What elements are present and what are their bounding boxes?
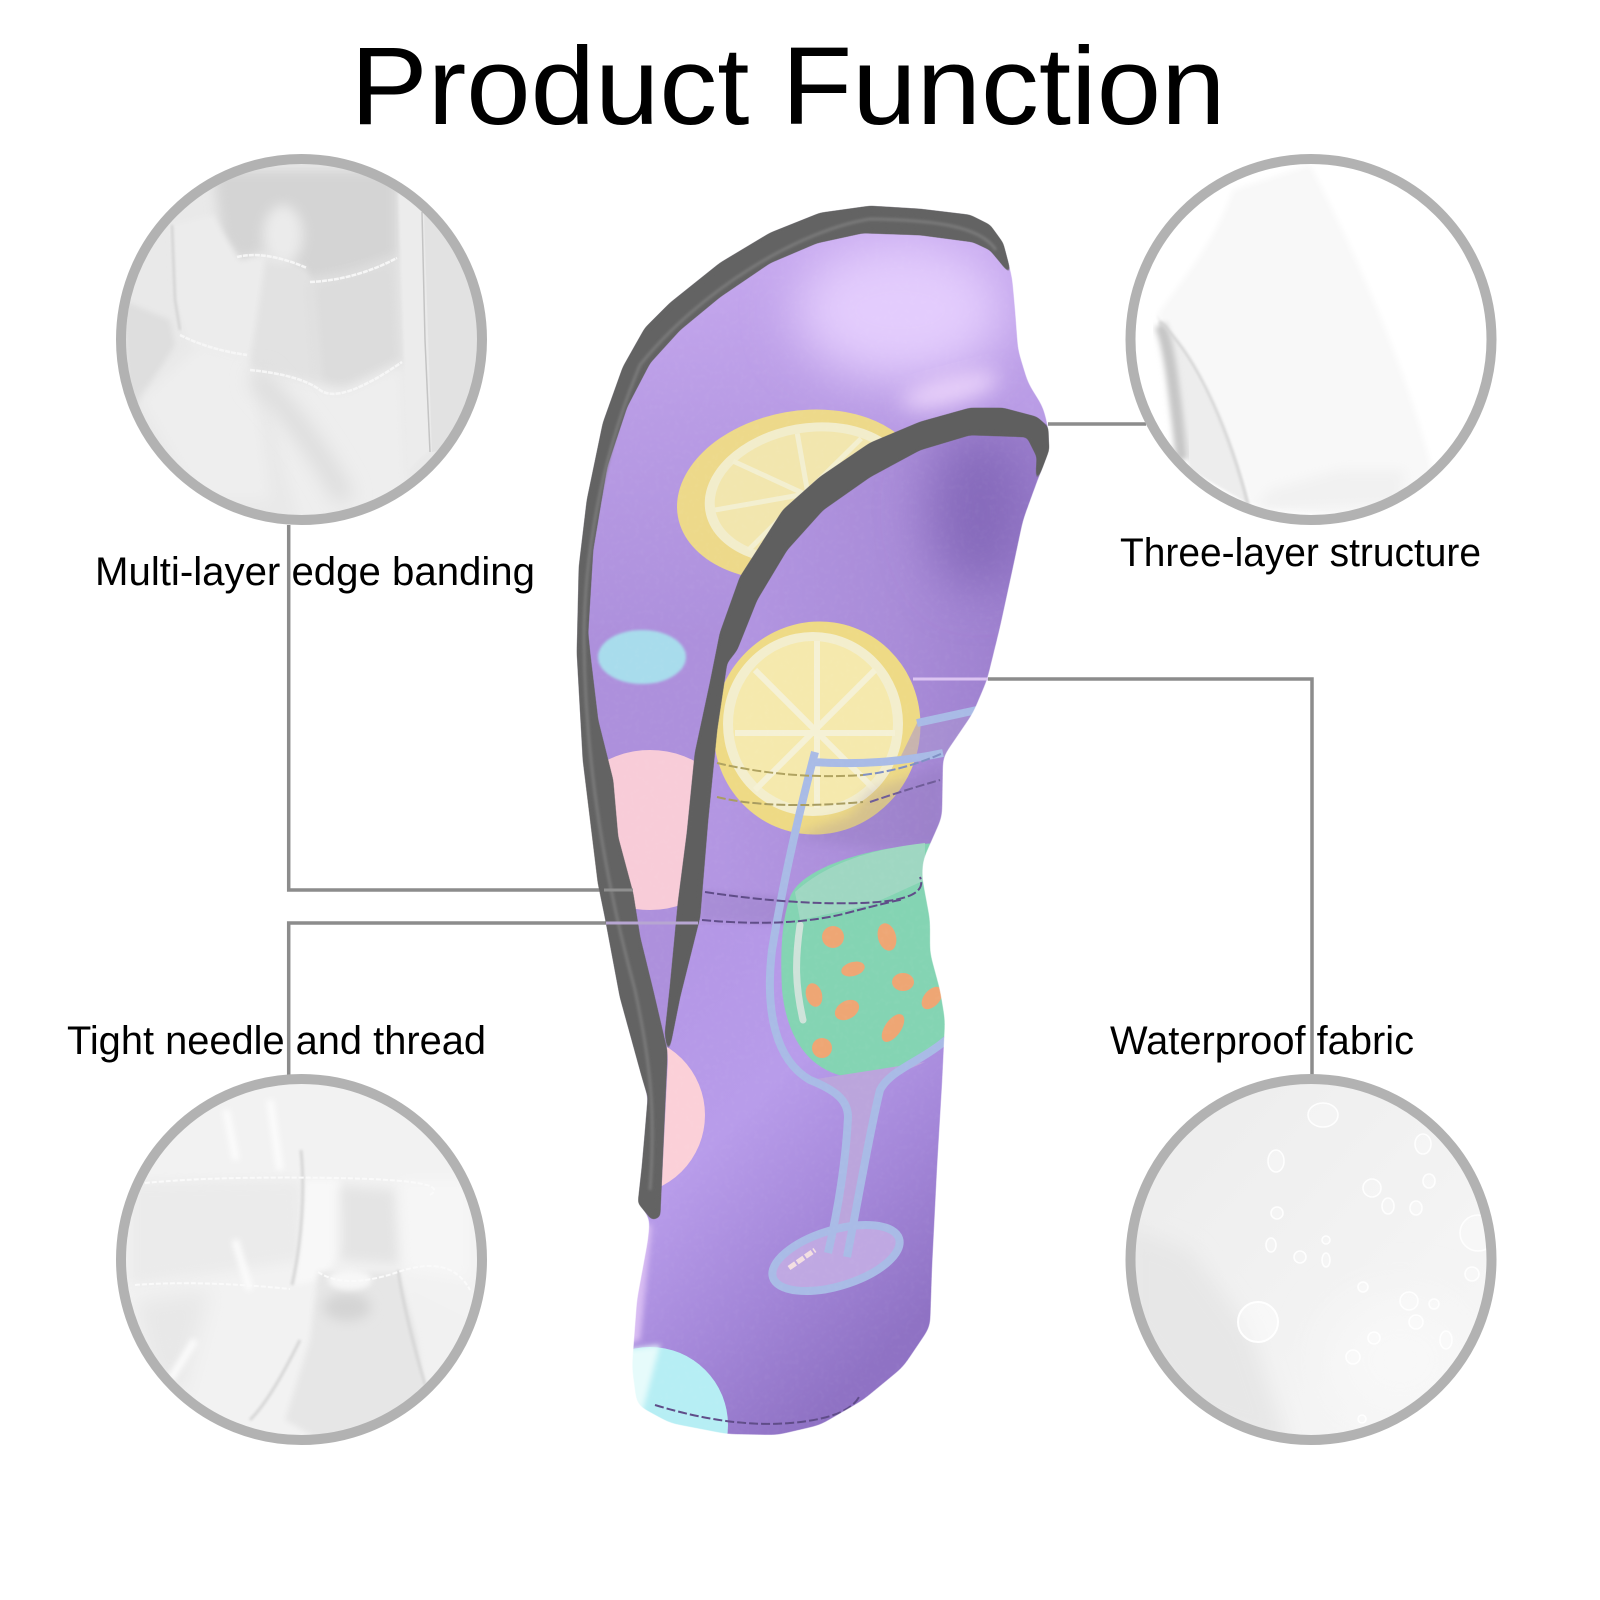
vertical band (398, 190, 430, 470)
label: tight needle and thread: Tight needle and thread (67, 1019, 486, 1063)
upper gather shading (802, 774, 940, 846)
left panel (217, 228, 236, 260)
right pocket (340, 1185, 400, 1265)
label: waterproof fabric: Waterproof fabric (1110, 1019, 1414, 1063)
shaded edge (1160, 325, 1182, 460)
lower right highlight (1330, 1300, 1470, 1420)
water droplets (1266, 1103, 1496, 1423)
faint leader crossings (604, 679, 988, 923)
back panel fabric (577, 206, 1048, 1218)
detail circle: three-layer structure (1120, 150, 1510, 540)
bump highlight (328, 1270, 372, 1290)
blue dot (598, 630, 686, 684)
lower fold shade (1255, 470, 1405, 510)
right white fold (400, 1180, 470, 1280)
back lemon slice (677, 410, 895, 575)
pale bottom corner (632, 1342, 663, 1409)
pink dot lower (545, 1035, 705, 1195)
cap highlight (795, 240, 1005, 380)
glass foot (768, 1221, 904, 1295)
label: multi-layer edge banding: Multi-layer edge banding (95, 550, 535, 594)
fold dark lines (250, 1150, 425, 1420)
right panel (424, 212, 500, 452)
main fold (1157, 165, 1432, 520)
lower fabric light (140, 345, 270, 500)
glass stem fill (818, 1062, 924, 1224)
product: golf head cover (576, 206, 1050, 1435)
lower gather shading (702, 892, 788, 922)
label: three-layer structure: Three-layer structure (1120, 531, 1481, 575)
pale lilac left strip (634, 1224, 654, 1344)
pink dot upper (587, 750, 694, 910)
liquid highlight (797, 925, 803, 1020)
center fold white (295, 1180, 350, 1285)
detail circle: multi-layer edge banding (110, 150, 500, 540)
lower right fold (410, 1290, 470, 1400)
cyan dot bottom (572, 1347, 728, 1503)
title: Product Function (350, 25, 1226, 148)
orange pieces (803, 921, 946, 1058)
green liquid (781, 843, 950, 1077)
leader line: waterproof fabric (988, 679, 1312, 1075)
front panel fabric (632, 423, 1048, 1435)
back edge binding (577, 206, 1012, 1220)
mid band shade (130, 1180, 305, 1285)
diagonal shadow (255, 375, 345, 500)
left shaded panel (1157, 315, 1250, 505)
leader line: multi-layer edge banding (289, 525, 604, 890)
foot highlight (789, 1250, 815, 1268)
front lemon slice (715, 622, 920, 834)
left gray sweep (135, 1290, 210, 1400)
back edge sheen (584, 219, 996, 1190)
fold line (172, 225, 180, 330)
stitching (180, 255, 402, 394)
lower gray panel (285, 1272, 428, 1440)
front edge binding (665, 408, 1049, 1057)
lower left shade (1125, 1225, 1290, 1450)
pinch shadow (323, 1293, 371, 1321)
vertical band line (422, 212, 430, 452)
leader line: three-layer structure (1048, 422, 1146, 426)
front panel shadow (930, 430, 1030, 590)
left edge fold (126, 305, 172, 399)
large droplet (1238, 1302, 1278, 1342)
glass tint above rim (901, 716, 970, 756)
fabric knob (263, 205, 303, 265)
leather grain (560, 190, 1070, 1450)
lower right light (260, 365, 408, 525)
seam (1160, 322, 1248, 505)
specular glints (170, 1100, 280, 1380)
detail circle: waterproof fabric (1120, 1070, 1510, 1460)
leader line: tight needle and thread (289, 923, 606, 1075)
detail circle: tight needle and thread (110, 1070, 500, 1460)
glass outline (770, 710, 977, 1257)
upper hollow (213, 170, 398, 282)
right pocket (310, 258, 402, 390)
cap pale crease (898, 364, 1002, 416)
stitches (655, 753, 943, 1424)
center fold (250, 262, 318, 385)
gathered liquid band (795, 843, 925, 920)
stitching (135, 1178, 470, 1290)
